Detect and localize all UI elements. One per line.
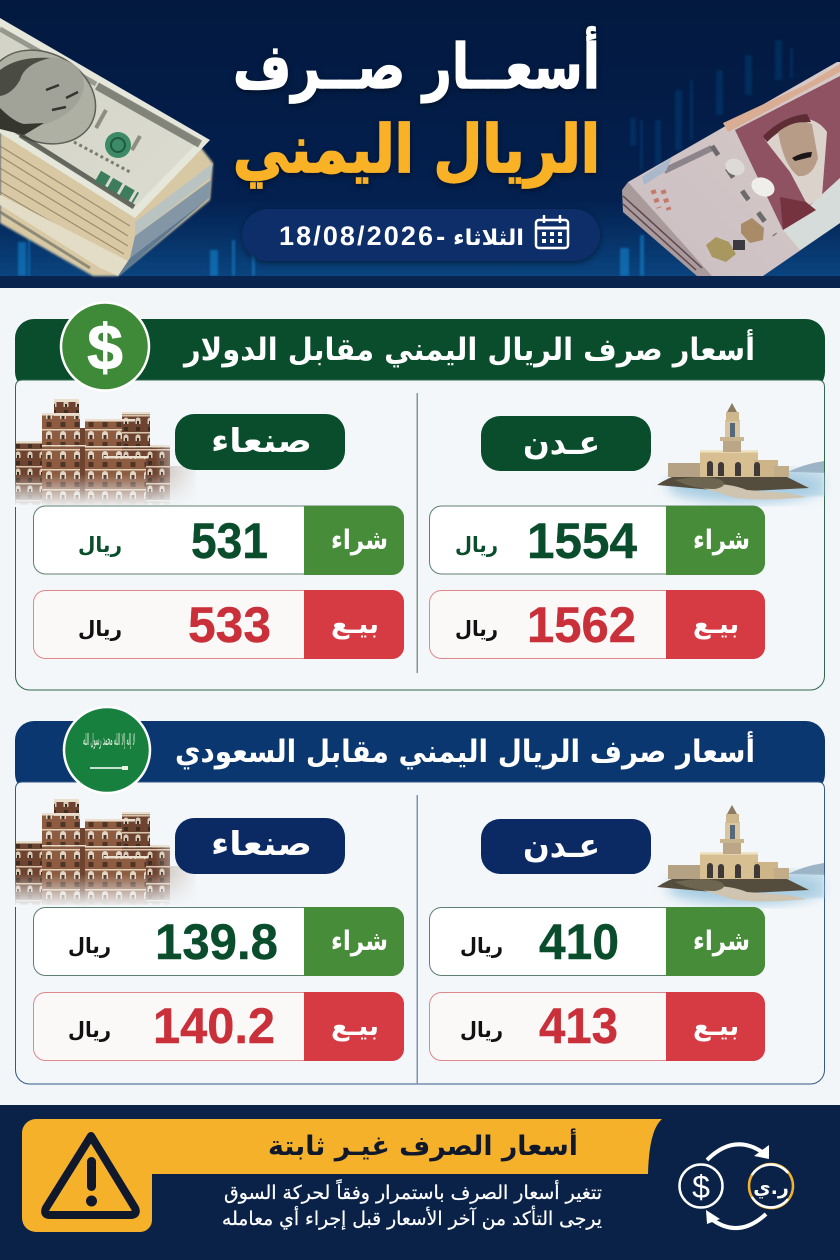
warning text line 1: تتغير أسعار الصرف باستمرار وفقاً لحركة السوق — [224, 1179, 602, 1204]
city pill: Sanaa — [175, 414, 345, 470]
footer — [0, 1105, 840, 1260]
row: Aden buy: 410 — [539, 914, 619, 970]
row: Sanaa sell: ريال — [68, 1018, 111, 1042]
warning text line 2: يرجى التأكد من آخر الأسعار قبل إجراء أي معامله — [222, 1205, 602, 1231]
row: Aden sell: بيـع — [693, 609, 739, 640]
row: Sanaa sell — [34, 992, 404, 1061]
city pill: Aden: عـدن — [523, 826, 600, 865]
icon: dollar banknote stack — [0, 18, 213, 276]
title line: gold: الريال اليمني — [233, 111, 600, 188]
divider — [416, 393, 418, 673]
weekday text: الثلاثاء - — [436, 226, 524, 251]
row: Sanaa buy — [34, 506, 404, 575]
row: Sanaa sell — [34, 590, 404, 659]
row: Sanaa buy: 531 — [191, 513, 268, 569]
warning heading: أسعار الصرف غيـر ثابتة — [268, 1128, 578, 1162]
row: Aden sell — [430, 590, 765, 659]
city pill: Aden — [481, 416, 651, 471]
row: Sanaa sell: 140.2 — [153, 998, 275, 1054]
title — [233, 26, 600, 188]
city pill: Aden: عـدن — [523, 423, 600, 462]
date text: 18/08/2026 — [279, 221, 433, 251]
icon: warning triangle — [45, 1136, 136, 1215]
row: Sanaa buy: ريال — [68, 934, 111, 958]
panel body — [16, 782, 824, 1084]
divider — [416, 795, 418, 1084]
row: Aden sell: 413 — [539, 998, 618, 1054]
row: Sanaa sell: 533 — [188, 597, 271, 653]
city pill: Sanaa — [175, 818, 345, 874]
title line: white: أسعــار صــرف — [233, 26, 600, 103]
warning banner — [22, 1119, 662, 1232]
row: Sanaa sell: بيـع — [331, 609, 379, 640]
panel: riyal vs saudi — [15, 707, 825, 1084]
row: Aden buy: شراء — [693, 926, 750, 957]
row: Aden buy — [430, 506, 765, 575]
row: Aden sell: بيـع — [693, 1011, 739, 1042]
row: Aden sell: ريال — [460, 1018, 503, 1042]
panel heading: أسعار صرف الريال اليمني مقابل السعودي — [175, 731, 755, 770]
row: Sanaa buy — [34, 907, 404, 976]
icon: currency exchange — [680, 1144, 793, 1228]
icon: dollar coin: $ — [87, 311, 123, 383]
row: Sanaa buy: شراء — [331, 926, 388, 957]
city pill: Sanaa: صنعاء — [211, 824, 312, 863]
icon: dollar coin — [61, 302, 149, 390]
panel body — [16, 380, 824, 690]
row: Aden buy: 1554 — [527, 513, 637, 569]
icon: currency exchange: ر.ي — [753, 1177, 789, 1200]
image: Sanaa towers — [15, 799, 200, 907]
row: Aden buy: ريال — [460, 934, 503, 958]
image: Aden lighthouse — [657, 805, 824, 905]
panel: riyal vs dollar — [15, 302, 825, 690]
row: Aden sell: ريال — [455, 617, 498, 641]
decorative candlestick glow — [18, 40, 793, 276]
panel: riyal vs saudi: لا إله إلا الله محمد رسول الله — [83, 730, 135, 750]
panel heading: أسعار صرف الريال اليمني مقابل الدولار — [182, 329, 755, 368]
image: Sanaa towers — [15, 399, 200, 507]
city pill: Sanaa: صنعاء — [211, 421, 312, 460]
row: Aden buy: شراء — [693, 525, 750, 556]
panel header — [15, 721, 825, 793]
icon: currency exchange: $ — [692, 1169, 710, 1205]
icon: saudi banknote stack — [622, 62, 840, 276]
row: Sanaa buy: ريال — [78, 533, 122, 557]
row: Aden sell — [430, 992, 765, 1061]
city pill: Aden — [481, 819, 651, 874]
row: Sanaa buy: شراء — [331, 525, 388, 556]
row: Sanaa sell: بيـع — [331, 1011, 379, 1042]
row: Sanaa sell: ريال — [78, 617, 122, 641]
row: Aden buy — [430, 907, 765, 976]
icon: saudi flag — [64, 707, 150, 793]
header banner — [0, 0, 840, 288]
panel header — [15, 319, 825, 391]
image: Aden lighthouse — [657, 403, 824, 503]
row: Aden sell: 1562 — [527, 597, 636, 653]
row: Sanaa buy: 139.8 — [155, 914, 278, 970]
row: Aden buy: ريال — [455, 533, 498, 557]
date pill — [242, 209, 600, 261]
icon: calendar — [536, 215, 568, 248]
